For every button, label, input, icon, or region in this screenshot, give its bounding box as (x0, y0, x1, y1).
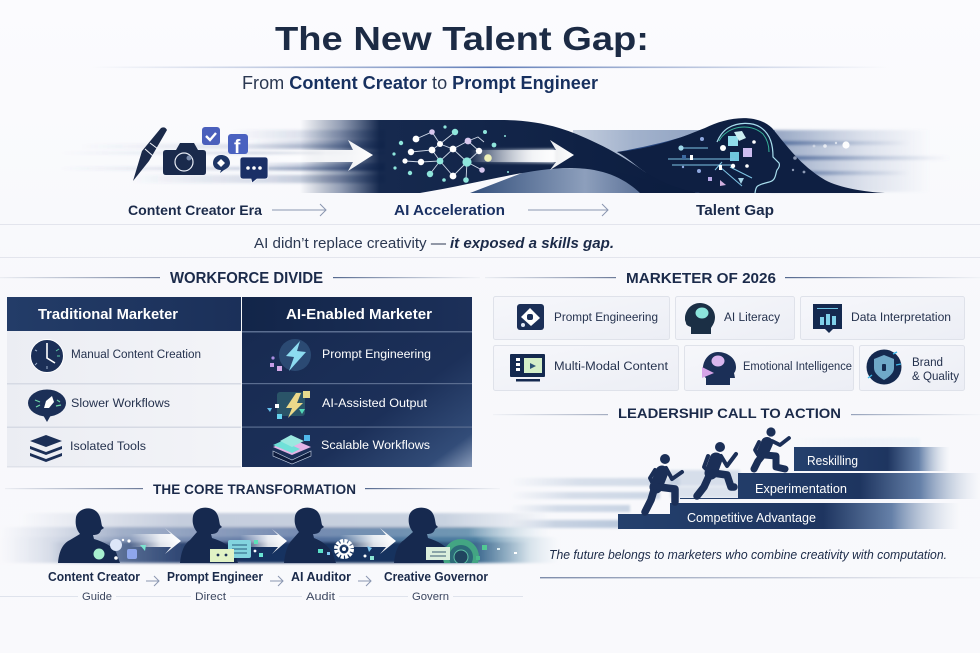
icon: neural network (392, 125, 509, 183)
ai-enabled column: AI-Assisted Output (322, 396, 428, 410)
staircase: call to action (510, 427, 980, 529)
ai-enabled column: Prompt Engineering (322, 347, 431, 361)
icon: social badges: f (234, 137, 241, 158)
motion streaks (510, 438, 920, 528)
icons: role tokens (94, 538, 517, 563)
icon: scalable layers (273, 435, 311, 464)
person: ai auditor (284, 508, 336, 563)
card: ai literacy (676, 296, 794, 340)
icon: camera (163, 143, 206, 175)
role: ai auditor: AI Auditor (291, 570, 351, 584)
role verbs: Govern (412, 591, 449, 603)
person: content creator (58, 508, 120, 563)
traditional column: Traditional Marketer (38, 307, 178, 323)
step: competitive advantage (618, 503, 960, 529)
timeline labels (128, 202, 774, 219)
label: talent gap: Talent Gap (696, 203, 774, 219)
role verbs: Direct (195, 591, 226, 603)
icon: prompt bolt (270, 339, 311, 371)
arrow two (470, 140, 574, 170)
role: content creator: Content Creator (48, 570, 140, 584)
heading: workforce divide: WORKFORCE DIVIDE (170, 270, 323, 287)
icon: pen (133, 127, 167, 181)
ai-enabled column: AI-Enabled Marketer (286, 307, 432, 323)
step: reskilling: Reskilling (807, 454, 858, 468)
motion streaks (60, 130, 385, 183)
step: competitive advantage: Competitive Advantage (687, 511, 816, 525)
step: reskilling (794, 447, 950, 471)
dark ribbon (300, 120, 697, 193)
card: brand and quality: Brand (912, 355, 943, 369)
blue band behind curve (573, 130, 775, 193)
step: experimentation (680, 473, 980, 499)
hero timeline band (60, 118, 950, 193)
key message: it exposed a skills gap. (450, 236, 614, 252)
icon: assisted output (267, 391, 310, 419)
dark head swell (617, 118, 885, 193)
card: brand and quality (860, 346, 964, 390)
panel: workforce divide table (7, 297, 472, 468)
figure: runner two (697, 442, 736, 496)
person: prompt engineer (180, 508, 238, 563)
panel: marketer skill cards (494, 296, 964, 390)
role labels (48, 570, 488, 586)
card: prompt engineering (494, 296, 670, 340)
arrow: acceleration to gap (528, 204, 608, 216)
card: ai literacy: AI Literacy (724, 310, 781, 324)
traditional column: Slower Workflows (71, 396, 170, 410)
key message (254, 236, 614, 252)
arrow one (255, 140, 373, 171)
label: ai acceleration: AI Acceleration (394, 203, 505, 219)
traditional column (7, 297, 241, 468)
card: emotional intelligence: Emotional Intelligence (743, 359, 852, 373)
arrow: era to acceleration (272, 204, 326, 216)
icon: stacked layers (30, 435, 62, 462)
role verbs (82, 591, 449, 603)
ai-enabled column: Scalable Workflows (321, 438, 430, 452)
person: creative governor (394, 508, 454, 563)
core transformation band (15, 508, 550, 565)
card: data interpretation (800, 296, 964, 340)
figure: runner one (645, 454, 682, 512)
card: multi-modal content (494, 346, 678, 390)
icon: social badges (202, 127, 268, 183)
arrow: role one (146, 576, 159, 586)
icon: workflow bubble (28, 390, 66, 422)
role: prompt engineer: Prompt Engineer (167, 570, 263, 584)
card: prompt engineering: Prompt Engineering (554, 310, 658, 324)
card: brand and quality: & Quality (912, 369, 960, 383)
role: creative governor: Creative Governor (384, 570, 488, 584)
arrow markers (130, 528, 396, 554)
card: multi-modal content: Multi-Modal Content (554, 359, 669, 373)
streaks right of head (770, 130, 950, 192)
icon: head with AI (668, 123, 850, 193)
role verbs: Audit (306, 591, 335, 603)
key message: AI didn’t replace creativity — (254, 236, 447, 252)
title: The New Talent Gap: (275, 20, 649, 57)
traditional column: Manual Content Creation (71, 347, 201, 361)
band streaks (0, 513, 560, 563)
step: experimentation: Experimentation (755, 482, 847, 496)
card: data interpretation: Data Interpretation (851, 310, 951, 324)
arrow: role three (358, 576, 371, 586)
heading: leadership call to action: LEADERSHIP CALL TO ACTION (618, 406, 841, 422)
light seam in ribbon (470, 149, 555, 163)
icon: clock (30, 340, 64, 372)
role verbs: Guide (82, 591, 112, 603)
heading: marketer of 2026: MARKETER OF 2026 (626, 271, 776, 287)
subtitle: From Content Creator to Prompt Engineer (242, 73, 598, 93)
heading: core transformation: THE CORE TRANSFORMATION (153, 482, 356, 497)
label: content creator era: Content Creator Era (128, 202, 262, 218)
card: emotional intelligence (684, 346, 854, 390)
arrow: role two (270, 576, 283, 586)
figure: runner three (754, 427, 789, 469)
ai-enabled column (242, 297, 472, 467)
closing statement: The future belongs to marketers who combine creativity with computation. (549, 547, 947, 562)
traditional column: Isolated Tools (70, 439, 146, 453)
